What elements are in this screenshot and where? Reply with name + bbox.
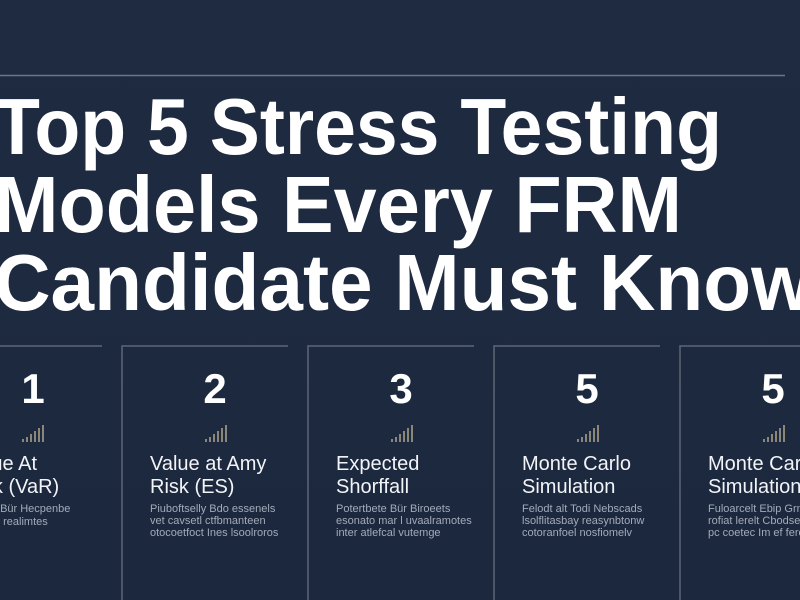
panel: 4: Simulation xyxy=(522,476,615,498)
panel: 3: Potertbete Bür Biroeets xyxy=(336,503,451,515)
panel: 3: inter atlefcal vutemge xyxy=(336,527,441,539)
panel: 5: Simulation xyxy=(708,476,800,498)
title: Top 5 Stress Testing xyxy=(0,82,722,171)
panel: 4: 5 xyxy=(575,365,599,412)
panel: 5: 5 xyxy=(761,365,785,412)
title xyxy=(0,82,800,327)
panel: 2: vet cavsetl ctfbmanteen xyxy=(150,515,266,527)
panel: 5 xyxy=(680,346,800,600)
panel: 3: Shorffall xyxy=(336,476,409,498)
title: Models Every FRM xyxy=(0,160,682,249)
panel: 4: Monte Carlo xyxy=(522,453,631,475)
panel: 4 xyxy=(494,346,660,600)
panel: 2 xyxy=(122,346,288,600)
panel: 2: Piuboftselly Bdo essenels xyxy=(150,503,276,515)
panel: 4: lsolflitasbay reasynbtonw xyxy=(522,515,644,527)
panel: 4: Felodt alt Todi Nebscads xyxy=(522,503,643,515)
panel: 2: 2 xyxy=(203,365,227,412)
panel: 3: 3 xyxy=(389,365,413,412)
panel: 2: Value at Amy xyxy=(150,453,266,475)
panel: 2: otocoetfoct Ines lsoolroros xyxy=(150,527,279,539)
panel: 1: 1 xyxy=(21,365,45,412)
panel: 3: esonato mar l uvaalramotes xyxy=(336,515,472,527)
panel: 3 xyxy=(308,346,474,600)
panel: 3: Expected xyxy=(336,453,419,475)
panel: 4: cotoranfoel nosfiomelv xyxy=(522,527,633,539)
panel: 1 xyxy=(0,346,102,600)
panel: 2: Risk (ES) xyxy=(150,476,234,498)
panel: 5: rofiat lerelt Cbodse xyxy=(708,515,800,527)
